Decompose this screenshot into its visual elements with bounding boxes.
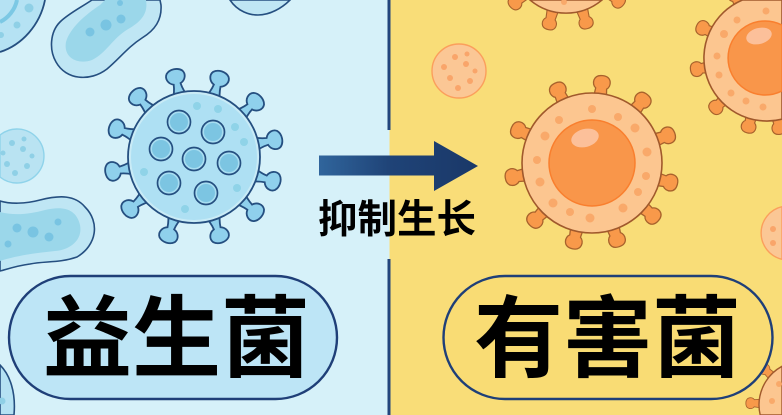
icon: bottom-right orange virus — [746, 362, 782, 415]
label: inhibits growth: 抑制生长 — [318, 198, 476, 242]
label pill: harmful bacteria — [444, 276, 772, 399]
icon: lower capsule bacterium — [0, 197, 94, 271]
icon: small round cell — [0, 129, 44, 183]
arrow — [319, 141, 478, 191]
icon: top orange virus — [506, 0, 628, 31]
label pill: harmful bacteria: 有害菌 — [474, 289, 741, 389]
divider — [388, 0, 390, 415]
panel: probiotic background — [0, 0, 390, 415]
label pill: probiotics: 益生菌 — [43, 289, 310, 389]
icon: right edge orange cell — [761, 207, 782, 259]
label pill: probiotics — [9, 276, 337, 399]
icon: large orange harmful microbe — [504, 75, 679, 251]
icon: top-right cell — [230, 0, 290, 15]
panel: harmful background — [390, 0, 782, 415]
icon: bottom-left cell — [0, 365, 14, 415]
icon: probiotic virus-shaped microbe — [104, 67, 284, 245]
icon: top-left round cell — [0, 0, 45, 52]
icon: top-right orange virus — [689, 0, 782, 136]
icon: top capsule bacterium — [51, 0, 161, 77]
icon: small orange cell — [432, 44, 486, 98]
